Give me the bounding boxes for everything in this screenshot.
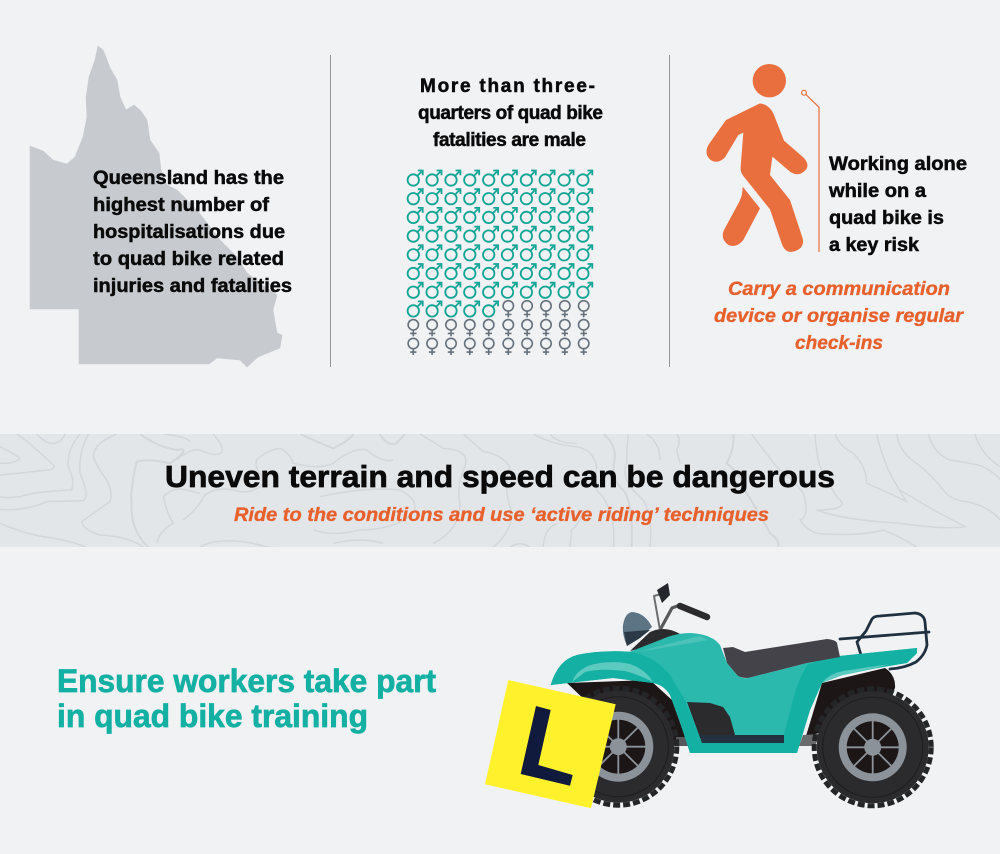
headlight [623,612,652,646]
handlebars and mirror [654,594,707,630]
illustration: quad bike [485,583,931,808]
text: Queensland has the highest number: Queensland has the [93,168,284,189]
icon: signal line [802,90,819,252]
text: more than three-quarters male: fatalities are male [433,130,586,151]
rear wheel [814,689,931,806]
panel: terrain banner [0,434,1000,547]
panel: Queensland statistic [30,46,292,367]
text: more than three-quarters male: quarters of quad bike [418,103,603,124]
heading: quad bike training [57,663,436,734]
icon: walking person [706,64,807,252]
text: Queensland has the highest number [93,168,292,297]
text: Queensland has the highest number: to quad bike related [93,249,284,270]
sign: yellow L plate [485,680,616,808]
pictogram: 75 male and 25 female symbols [408,170,592,355]
rear rack [840,613,929,669]
text: Queensland has the highest number: injuries and fatalities [93,276,292,297]
front wheel [560,688,677,805]
callout: carry a communication device: device or organise regular [714,306,965,327]
text: working alone risk: while on a [828,181,926,202]
callout: carry a communication device [714,279,965,354]
map: Queensland [30,46,282,367]
text: Queensland has the highest number: highest number of [93,195,270,216]
heading: quad bike training: in quad bike training [57,698,368,734]
text: working alone risk: quad bike is [829,208,944,229]
darker teal fender bands [551,648,917,753]
fender highlight [572,662,653,682]
subheading: ride to the conditions: Ride to the conditions and use ‘active riding’ techniques [234,505,769,526]
text: Queensland has the highest number: hospitalisations due [93,222,285,243]
letter L glyph [521,706,573,786]
fender undersides [567,680,688,745]
text: working alone risk: Working alone [829,154,967,175]
seat [723,639,840,678]
text: more than three-quarters male [418,76,603,151]
text: working alone risk: a key risk [829,235,919,256]
dark foot panel [687,702,784,743]
panel: working alone [706,64,967,354]
panel: male fatalities [408,76,603,355]
heading: uneven terrain: Uneven terrain and speed can be dangerous [165,459,835,494]
teal body [551,633,917,753]
text: more than three-quarters male: More than three- [420,76,595,97]
callout: carry a communication device: Carry a communication [728,279,950,300]
callout: carry a communication device: check-ins [795,333,883,354]
heading: quad bike training: Ensure workers take part [57,663,436,699]
text: working alone risk [828,154,967,256]
